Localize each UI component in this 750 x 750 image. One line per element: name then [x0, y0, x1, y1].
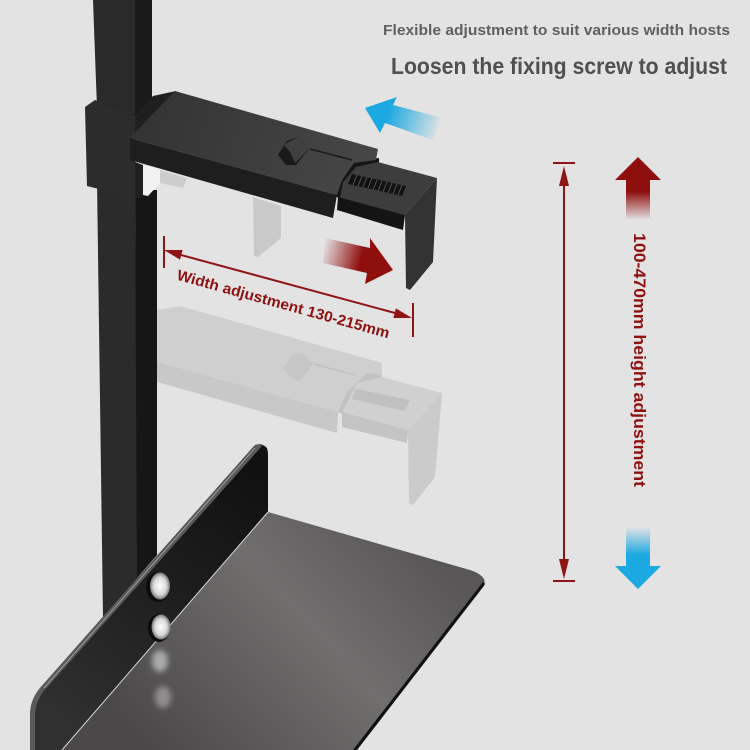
- reflections: [152, 650, 168, 672]
- arrow: red outward: [323, 238, 393, 284]
- arrow: red up: [615, 157, 661, 220]
- collar clamp: [85, 100, 135, 198]
- height dimension line: [553, 163, 575, 581]
- screw top: [146, 572, 170, 602]
- ghost bracket: faded lower position: [157, 306, 442, 505]
- top bracket arm: [130, 91, 437, 290]
- screw bottom: [148, 614, 170, 642]
- ghost bracket: faded upper position: [160, 170, 281, 257]
- silver clamp detail: [143, 165, 160, 196]
- arrow: blue down: [615, 527, 661, 589]
- rear flange: [30, 444, 268, 750]
- ghost grip: [352, 389, 410, 411]
- slider: [340, 162, 437, 215]
- fixing screw: [278, 137, 309, 165]
- upright post: [85, 0, 176, 618]
- height label: 100-470mm height adjustment: [630, 233, 649, 487]
- slider grip: [348, 174, 406, 196]
- ghost fixing screw: [283, 353, 313, 381]
- heading: loosen screw: Loosen the fixing screw to adjust: [391, 53, 727, 79]
- heading: flexible adjustment: Flexible adjustment to suit various width hosts: [383, 22, 730, 39]
- width label: Width adjustment 130-215mm: [175, 267, 391, 342]
- width dimension line: [164, 236, 413, 337]
- base plate: [30, 444, 485, 750]
- arrow: blue inward: [365, 97, 443, 140]
